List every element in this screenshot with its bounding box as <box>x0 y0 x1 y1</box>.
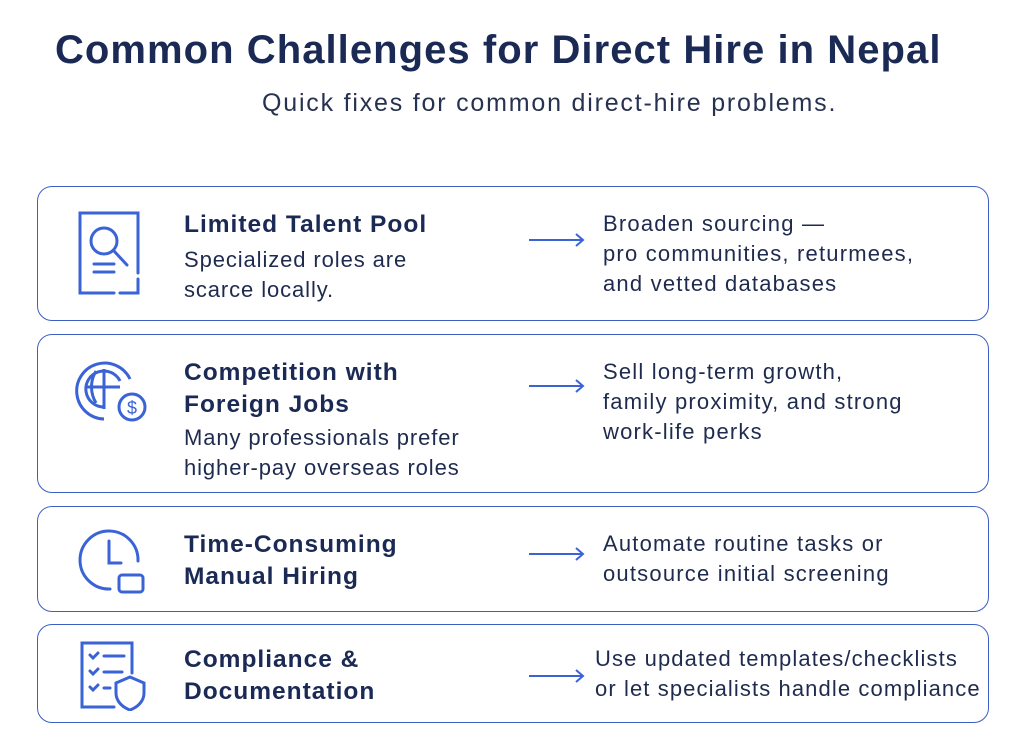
description: Many professionals prefer <box>184 425 460 450</box>
description: higher-pay overseas roles <box>184 455 460 480</box>
heading <box>184 531 398 590</box>
fix text: pro communities, returmees, <box>603 241 914 266</box>
icon: checklist shield <box>80 642 146 711</box>
heading: Manual Hiring <box>184 563 359 590</box>
fix text: family proximity, and strong <box>603 389 903 414</box>
fix text: Use updated templates/checklists <box>595 646 958 671</box>
heading <box>184 359 399 418</box>
fix text: Sell long-term growth, <box>603 359 843 384</box>
description: Specialized roles are <box>184 247 407 272</box>
heading: Compliance & <box>184 646 359 673</box>
description <box>184 425 460 480</box>
fix text: outsource initial screening <box>603 561 890 586</box>
fix text: Automate routine tasks or <box>603 531 884 556</box>
panel: competition with foreign jobs <box>37 334 989 493</box>
arrow <box>529 233 584 247</box>
title: Common Challenges for Direct Hire in Nepal <box>55 28 941 72</box>
panel: compliance & documentation <box>37 624 989 723</box>
fix text: Broaden sourcing — <box>603 211 825 236</box>
arrow <box>529 547 584 561</box>
arrow <box>529 669 584 683</box>
fix text: work-life perks <box>603 419 763 444</box>
icon: clock <box>78 530 144 594</box>
arrow <box>529 379 584 393</box>
heading <box>184 646 375 705</box>
heading: Time-Consuming <box>184 531 398 558</box>
fix text <box>603 359 903 444</box>
fix text: or let specialists handle compliance <box>595 676 981 701</box>
description <box>184 247 407 302</box>
subtitle: Quick fixes for common direct-hire problems. <box>262 89 837 117</box>
heading: Documentation <box>184 678 375 705</box>
fix text <box>603 211 914 296</box>
heading: Competition with <box>184 359 399 386</box>
fix text <box>603 531 890 586</box>
icon: document search <box>78 212 140 294</box>
panel: time-consuming manual hiring <box>37 506 989 612</box>
heading: Foreign Jobs <box>184 391 350 418</box>
icon: globe with dollar <box>75 362 146 422</box>
fix text <box>595 646 981 701</box>
fix text: and vetted databases <box>603 271 837 296</box>
icon: globe with dollar: $ <box>127 398 137 418</box>
heading: Limited Talent Pool <box>184 211 427 238</box>
description: scarce locally. <box>184 277 334 302</box>
panel: limited talent pool <box>37 186 989 321</box>
